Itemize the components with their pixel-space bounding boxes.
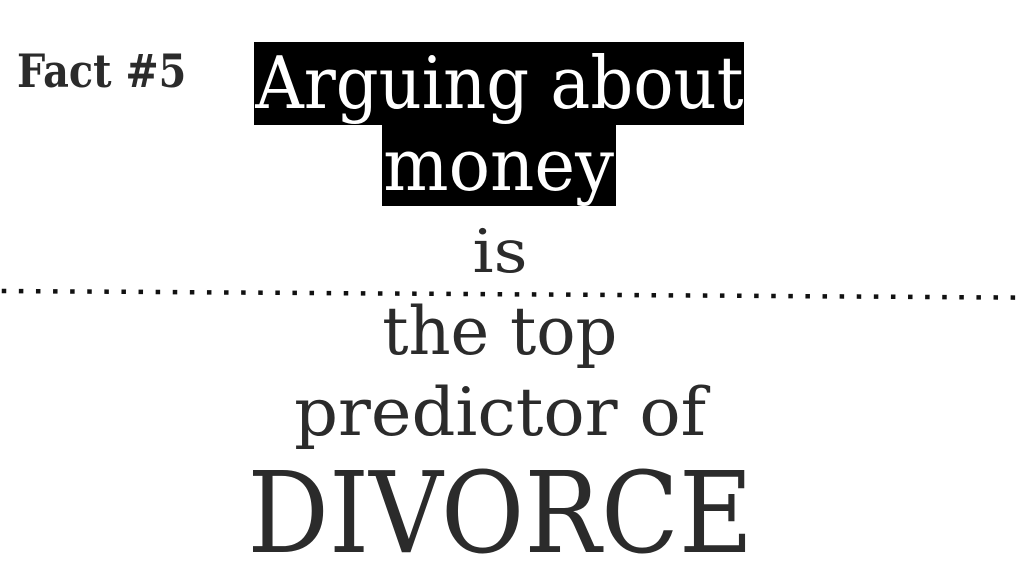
text: is: is — [473, 217, 527, 287]
label: Fact #5: Fact #5 — [17, 44, 186, 98]
text: predictor of: predictor of — [294, 374, 706, 451]
heading highlight line 2: money — [384, 123, 614, 207]
text: the top: the top — [382, 293, 618, 370]
heading highlight line 1: Arguing about — [255, 41, 743, 125]
dotted divider — [2, 288, 1016, 300]
